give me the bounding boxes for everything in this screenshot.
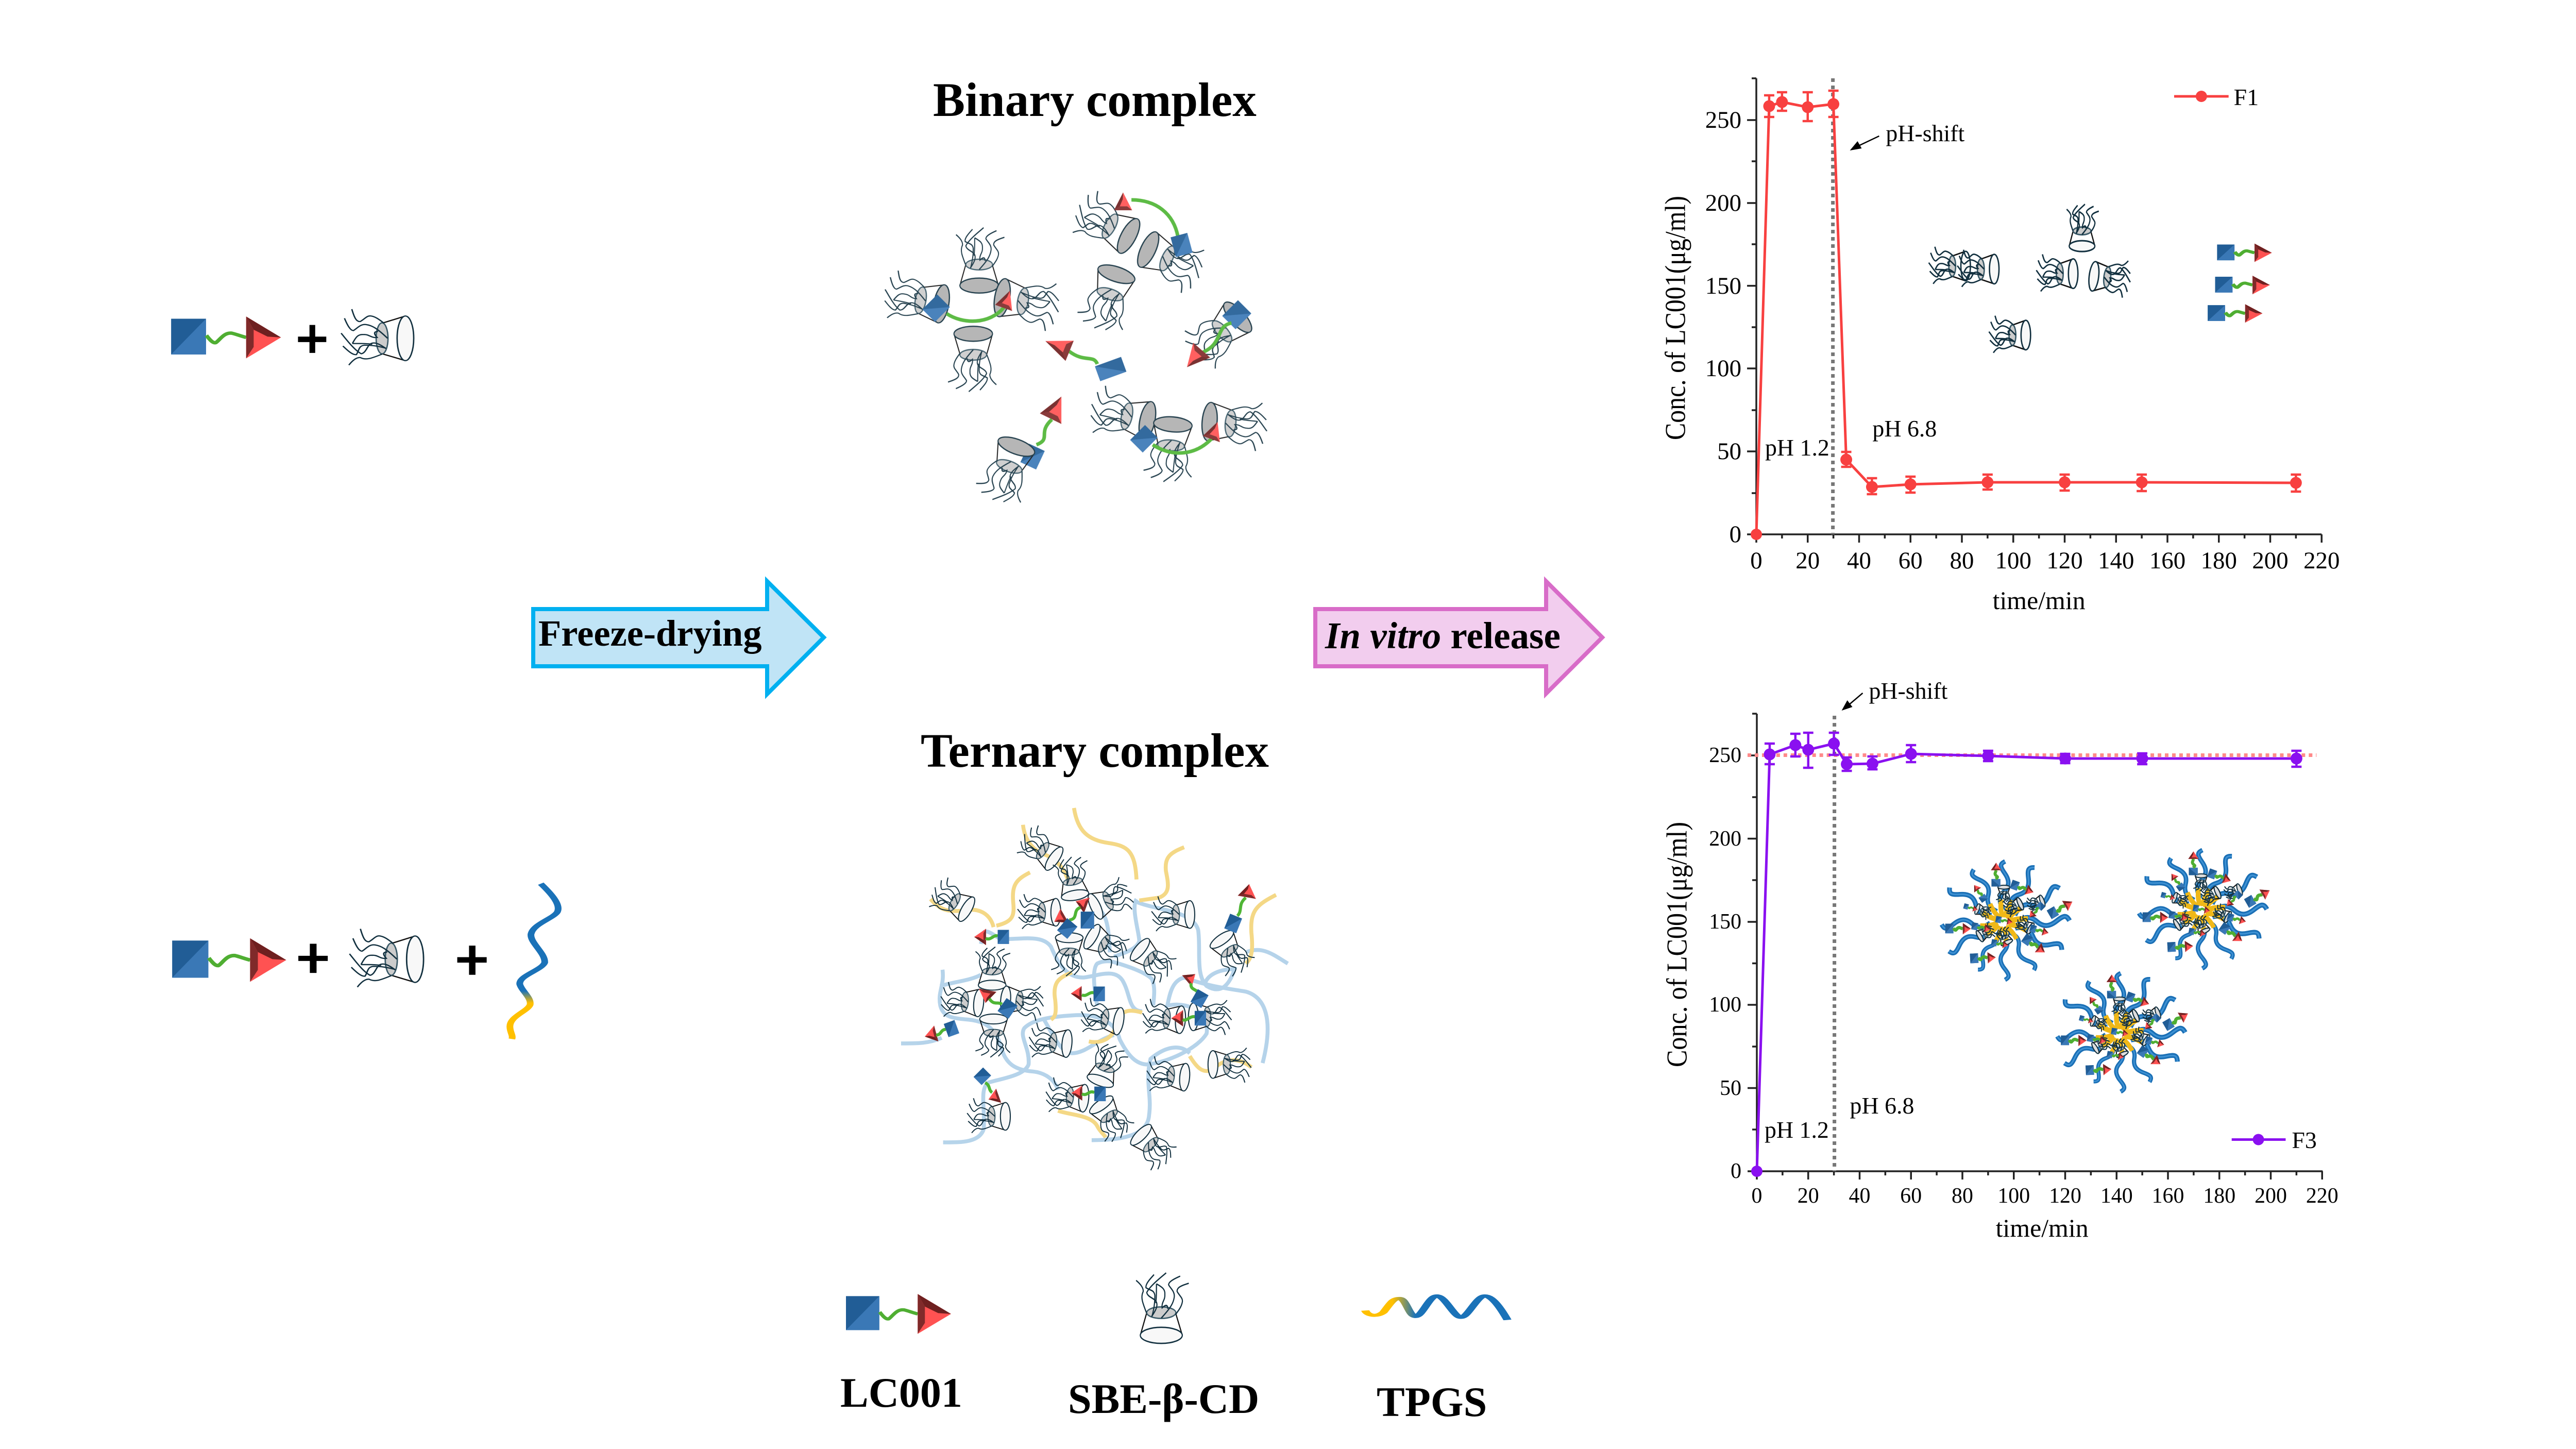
icon: TPGS	[1365, 1296, 1507, 1320]
y tick labels: 0	[1731, 1159, 1741, 1183]
x axis title: time/min	[1993, 586, 2086, 615]
arrow: freeze-drying	[533, 581, 824, 694]
arrow: pH-shift	[1850, 136, 1879, 150]
y tick labels: 250	[1709, 744, 1741, 767]
LC001 molecules	[923, 883, 1258, 1106]
x tick labels: 200	[2252, 547, 2289, 574]
x tick labels: 120	[2049, 1184, 2081, 1208]
chart: F3 release profile	[1661, 678, 2338, 1242]
x tick labels: 80	[1950, 547, 1974, 574]
legend: F3: F3	[2292, 1127, 2317, 1153]
x tick labels: 40	[1847, 547, 1871, 574]
x tick labels: 100	[1995, 547, 2031, 574]
y axis title: Conc. of LC001(μg/ml)	[1661, 822, 1693, 1067]
annotation: pH-shift: pH-shift	[1886, 120, 1965, 146]
x tick labels	[1750, 547, 2340, 574]
x tick labels: 140	[2100, 1184, 2133, 1208]
x tick labels	[1752, 1184, 2338, 1208]
annotation: pH 1.2: pH 1.2	[1765, 434, 1829, 461]
legend: components	[840, 1273, 1507, 1425]
y tick labels: 50	[1717, 438, 1741, 465]
LC001 molecules	[922, 192, 1251, 509]
y tick labels: 150	[1705, 273, 1741, 299]
axes	[1748, 714, 2323, 1180]
label: TPGS: TPGS	[1377, 1378, 1487, 1425]
ternary formulation components	[172, 884, 558, 1039]
arrow: in vitro release: In vitro release	[1325, 615, 1561, 656]
inset: free cyclodextrin and drug	[1929, 204, 2272, 353]
arrow: in vitro release	[1315, 581, 1602, 694]
label: SBE-beta-CD: SBE-β-CD	[1068, 1375, 1259, 1422]
x tick labels: 60	[1900, 1184, 1922, 1208]
x tick labels: 120	[2046, 547, 2083, 574]
legend: F3	[2232, 1127, 2317, 1153]
label: LC001: LC001	[840, 1369, 962, 1416]
y tick labels: 50	[1720, 1076, 1741, 1100]
arrow: freeze-drying: Freeze-drying	[538, 612, 761, 654]
y tick labels: 200	[1709, 827, 1741, 851]
x tick labels: 100	[1997, 1184, 2030, 1208]
x tick labels: 20	[1795, 547, 1820, 574]
x axis title: time/min	[1996, 1214, 2089, 1242]
y tick labels	[1705, 107, 1741, 548]
y tick labels: 0	[1730, 521, 1741, 548]
icon: plus	[298, 325, 326, 353]
x tick labels: 60	[1899, 547, 1923, 574]
binary formulation components	[171, 309, 414, 365]
icon: SBE-beta-CD	[341, 309, 414, 365]
legend: F1	[2174, 84, 2259, 110]
y tick labels	[1709, 744, 1741, 1183]
F1 series	[1751, 91, 2302, 540]
x tick labels: 0	[1752, 1184, 1762, 1208]
x tick labels: 200	[2255, 1184, 2287, 1208]
SBE-beta-CD molecules	[925, 822, 1257, 1175]
title: binary complex: Binary complex	[933, 74, 1257, 127]
arrow: pH-shift	[1842, 693, 1862, 711]
legend: F1: F1	[2234, 84, 2259, 110]
annotation: pH 1.2: pH 1.2	[1765, 1117, 1829, 1143]
x tick labels: 220	[2306, 1184, 2338, 1208]
y tick labels: 100	[1709, 993, 1741, 1017]
x tick labels: 160	[2149, 547, 2185, 574]
icon: SBE-beta-CD	[349, 929, 423, 987]
x tick labels: 20	[1798, 1184, 1819, 1208]
y tick labels: 250	[1705, 107, 1741, 133]
y tick labels: 100	[1705, 355, 1741, 382]
annotation: pH 6.8: pH 6.8	[1872, 415, 1937, 442]
icon: plus	[457, 946, 487, 975]
pH shift dotted line	[1831, 78, 1835, 534]
x tick labels: 0	[1750, 547, 1762, 574]
icon: TPGS ribbon	[510, 884, 558, 1039]
icon: LC001 molecule	[171, 316, 281, 359]
F3 series	[1751, 733, 2302, 1177]
axes	[1747, 78, 2321, 543]
diagram: binary complex	[880, 187, 1269, 509]
title: ternary complex: Ternary complex	[921, 724, 1269, 778]
x tick labels: 160	[2152, 1184, 2184, 1208]
x tick labels: 40	[1849, 1184, 1870, 1208]
diagram: ternary complex	[901, 808, 1288, 1175]
icon: LC001 molecule	[172, 938, 286, 982]
annotation: pH 6.8: pH 6.8	[1850, 1092, 1914, 1119]
inset: micelles	[1941, 850, 2273, 1092]
icon: plus	[298, 944, 328, 973]
x tick labels: 180	[2201, 547, 2237, 574]
icon: LC001	[846, 1294, 951, 1334]
x tick labels: 180	[2203, 1184, 2235, 1208]
SBE-beta-CD molecules	[880, 187, 1269, 484]
pH shift dotted line	[1833, 716, 1836, 1171]
icon: SBE-beta-CD	[1136, 1273, 1189, 1343]
y tick labels: 200	[1705, 190, 1741, 216]
y axis title: Conc. of LC001(μg/ml)	[1659, 196, 1691, 440]
x tick labels: 220	[2303, 547, 2340, 574]
annotation: pH-shift: pH-shift	[1869, 678, 1948, 704]
y tick labels: 150	[1709, 910, 1741, 934]
x tick labels: 140	[2098, 547, 2134, 574]
reference dotted line	[1748, 753, 2316, 757]
TPGS network strands	[901, 808, 1288, 1142]
x tick labels: 80	[1952, 1184, 1973, 1208]
chart: F1 release profile	[1659, 78, 2340, 615]
